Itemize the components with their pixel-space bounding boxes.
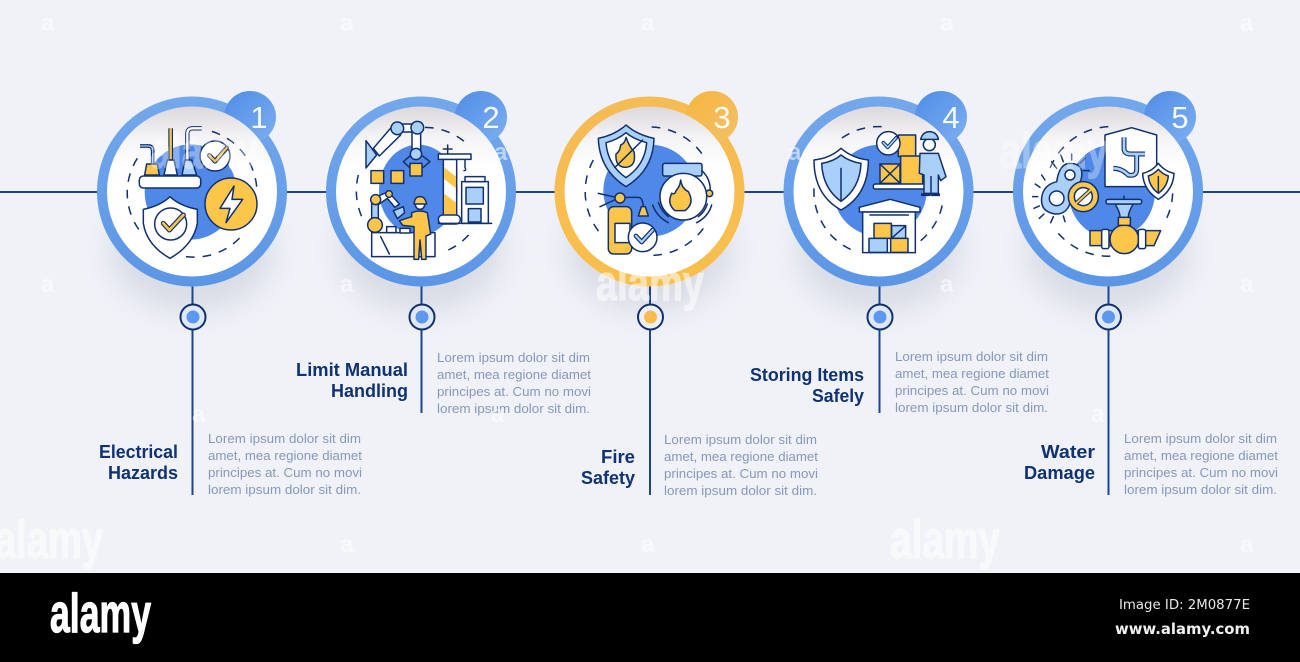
body text 5 [1124,431,1278,497]
body text 5: amet, mea regione diamet [1124,448,1278,463]
watermarks: a [340,531,354,558]
watermarks: a [1240,10,1254,37]
number badge 4: 4 [942,100,960,135]
heading 3: Safety [581,468,635,488]
website: www.alamy.com [1115,620,1250,638]
number badge 4 [915,91,967,143]
step 2: limit manual handling [296,91,591,416]
icon: shield, worker and warehouse [814,127,946,253]
ring 2 [326,96,516,286]
watermarks: a [641,10,655,37]
number badge 1 [224,91,276,143]
body text 3: principes at. Cum no movi [664,466,818,481]
watermarks: alamy [596,255,704,311]
circle shadow [797,188,961,312]
body text 1: amet, mea regione diamet [208,448,362,463]
node 2 [410,304,434,330]
body text 4: lorem ipsum dolor sit dim. [895,400,1048,415]
inner disc 2 [336,106,506,276]
step 4: storing items safely [750,91,1049,415]
ring 4 [784,96,974,286]
ring 3 [554,96,744,286]
body text 1 [208,431,362,497]
body text 3 [664,432,818,498]
watermarks: a [340,10,354,37]
body text 2: amet, mea regione diamet [437,367,591,382]
body text 2: principes at. Cum no movi [437,384,591,399]
circle shadow [1026,188,1190,312]
heading 5: Water [1041,442,1095,462]
heading 4 [750,365,864,406]
footer logo: alamy [50,582,151,644]
timeline stem 1 [192,286,194,495]
body text 2: Lorem ipsum dolor sit dim [437,350,590,365]
body text 2 [437,350,591,416]
body text 1: principes at. Cum no movi [208,465,362,480]
inner disc 5 [1023,106,1193,276]
body text 1: Lorem ipsum dolor sit dim [208,431,361,446]
body text 5: lorem ipsum dolor sit dim. [1124,482,1277,497]
body text 2: lorem ipsum dolor sit dim. [437,401,590,416]
heading 4: Safely [812,386,864,406]
number badge 3: 3 [713,100,731,135]
watermarks: a [41,10,55,37]
node 5 [1096,304,1121,330]
body text 3: amet, mea regione diamet [664,449,818,464]
heading 1: Electrical [99,442,178,462]
number badge 5 [1144,91,1196,143]
image id: Image ID: 2M0877E [1119,597,1250,613]
timeline horizontal line [0,191,1300,193]
number badge 3 [686,91,738,143]
heading 4: Storing Items [750,365,864,385]
inner disc 1 [107,106,277,276]
icon: fire shield, alarm and extinguisher [585,125,713,255]
node 4 [868,304,892,330]
number badge 2 [455,91,507,143]
timeline stem 2 [420,286,422,413]
heading 2: Handling [331,381,408,401]
ring 1 [97,96,287,286]
body text 4: Lorem ipsum dolor sit dim [895,349,1048,364]
body text 4 [895,349,1049,415]
ring 5 [1013,96,1203,286]
heading 1 [99,442,178,483]
timeline stem 4 [878,286,880,413]
watermarks: a [1240,271,1254,298]
heading 5: Damage [1024,463,1095,483]
heading 3: Fire [601,447,635,467]
step 3: fire safety [554,91,818,498]
watermarks: alamy [890,510,1000,570]
watermarks: a [41,271,55,298]
icon: robots, crane and worker [356,121,492,259]
circle shadow [568,188,732,312]
heading 2: Limit Manual [296,360,408,380]
icon: power strip with shield and bolt [127,128,257,258]
body text 3: lorem ipsum dolor sit dim. [664,483,817,498]
body text 1: lorem ipsum dolor sit dim. [208,482,361,497]
icon: mould, pipes and valve [1033,127,1174,256]
heading 5 [1024,442,1095,483]
watermarks: a [494,139,508,166]
body text 5: principes at. Cum no movi [1124,465,1278,480]
inner disc 4 [794,106,964,276]
step 1: electrical hazards [97,91,362,497]
watermarks: a [491,401,505,428]
watermarks: a [192,401,206,428]
timeline stem 3 [649,286,651,495]
circle shadow [110,188,274,312]
watermarks: alamy [1000,123,1108,179]
footer bar [0,573,1300,662]
timeline stem 5 [1108,286,1110,495]
node 3 [638,304,663,330]
step 5: water damage [1013,91,1278,497]
node 1 [180,304,206,330]
body text 3: Lorem ipsum dolor sit dim [664,432,817,447]
body text 5: Lorem ipsum dolor sit dim [1124,431,1277,446]
heading 1: Hazards [108,463,178,483]
heading 2 [296,360,408,401]
body text 4: principes at. Cum no movi [895,383,1049,398]
number badge 1: 1 [250,100,268,135]
watermarks: a [1240,531,1254,558]
watermarks: alamy [150,123,258,179]
watermarks: a [940,10,954,37]
watermarks: a [940,271,954,298]
number badge 2: 2 [482,100,500,135]
inner disc 3 [564,106,734,276]
watermarks: a [340,271,354,298]
heading 3 [581,447,635,488]
circle shadow [339,188,503,312]
body text 4: amet, mea regione diamet [895,366,1049,381]
watermarks: a [1091,401,1105,428]
watermarks: a [788,139,802,166]
watermarks: a [641,531,655,558]
number badge 5: 5 [1171,100,1189,135]
